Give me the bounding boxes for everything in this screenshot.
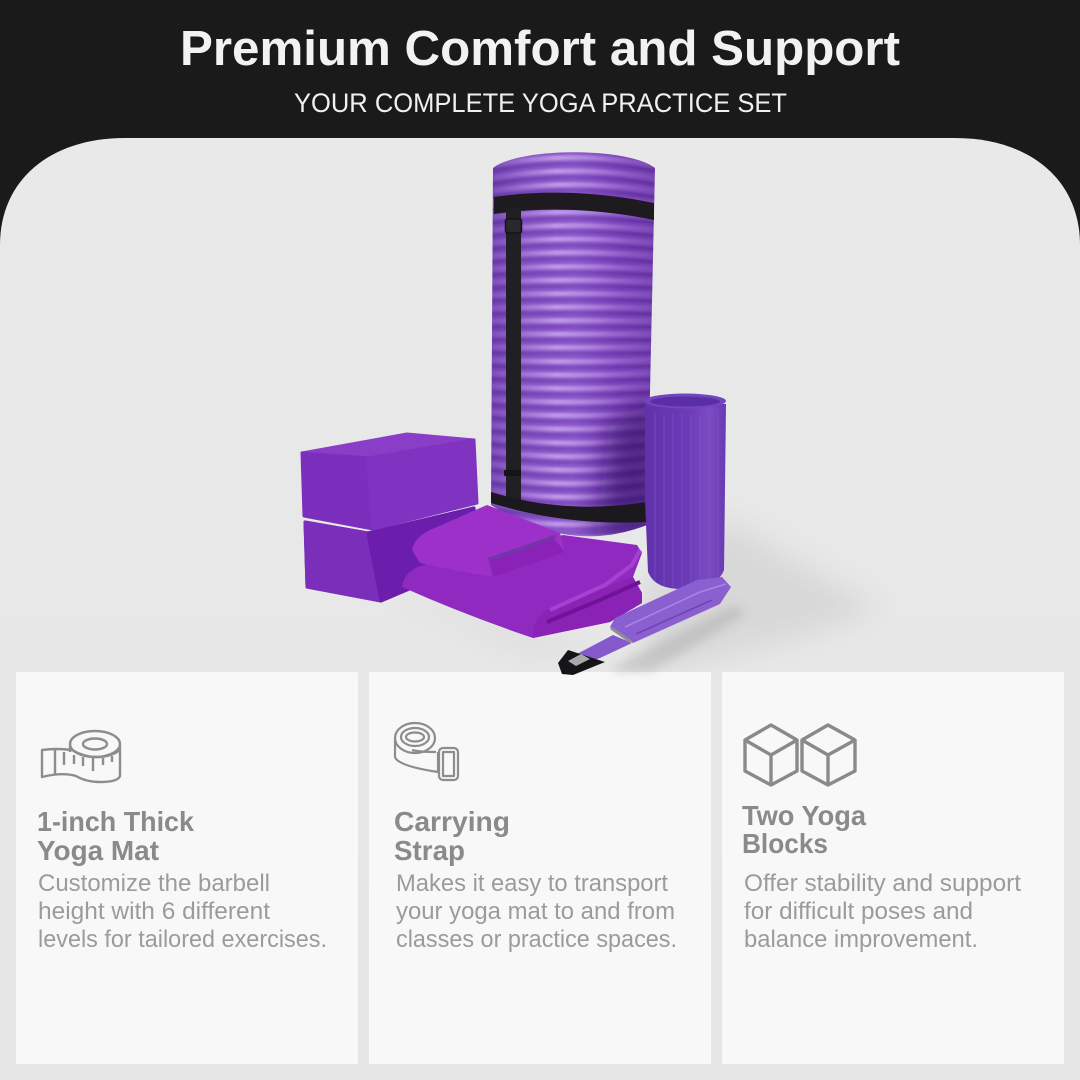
card 1 body text: Customize the barbell (38, 870, 270, 897)
mat strap, bottom band (491, 492, 646, 523)
mat strap, vertical band (506, 208, 521, 500)
card 3 body text: balance improvement. (744, 926, 978, 953)
card 2 body text: Makes it easy to transport (396, 870, 668, 897)
card 1 body text: height with 6 different (38, 898, 270, 925)
stretch strap (558, 577, 745, 675)
card 1 body text: levels for tailored exercises. (38, 926, 327, 953)
card 2 body text: classes or practice spaces. (396, 926, 677, 953)
card 2 body text: your yoga mat to and from (396, 898, 675, 925)
header background (0, 0, 1080, 300)
card 1 heading (37, 806, 194, 866)
card 3 body text: for difficult poses and (744, 898, 973, 925)
floor shadows (380, 520, 880, 672)
icon: two blocks (745, 725, 855, 785)
yoga block, lower (305, 508, 478, 601)
card 1 body text (38, 870, 327, 953)
panel: card 3 (722, 672, 1064, 1064)
card 3 body text: Offer stability and support (744, 870, 1021, 897)
mat strap, top band (494, 193, 654, 220)
card 2 heading (394, 806, 510, 866)
folded towel, large (402, 535, 642, 638)
subtitle: YOUR COMPLETE YOGA PRACTICE SET (294, 88, 787, 118)
card 2 body text (396, 870, 677, 953)
panel: card 2 (369, 672, 711, 1064)
icon: carrying strap (395, 723, 458, 780)
yoga block, upper (302, 434, 477, 529)
card 3 heading (742, 800, 866, 859)
icon: measuring tape (42, 731, 120, 782)
card 2 heading: Strap (394, 835, 465, 866)
panel: card 1 (16, 672, 358, 1064)
title: Premium Comfort and Support (180, 22, 900, 76)
strap buckle (558, 650, 605, 675)
knee pad roll (644, 394, 726, 589)
folded towel, small (412, 505, 565, 577)
card 2 heading: Carrying (394, 806, 510, 837)
card 3 heading: Two Yoga (742, 800, 866, 831)
card 3 heading: Blocks (742, 828, 828, 859)
card 1 heading: Yoga Mat (37, 835, 159, 866)
rolled yoga mat (491, 152, 660, 540)
mat strap, buckle (506, 219, 522, 233)
card 1 heading: 1-inch Thick (37, 806, 194, 837)
card 3 body text (744, 870, 1021, 953)
